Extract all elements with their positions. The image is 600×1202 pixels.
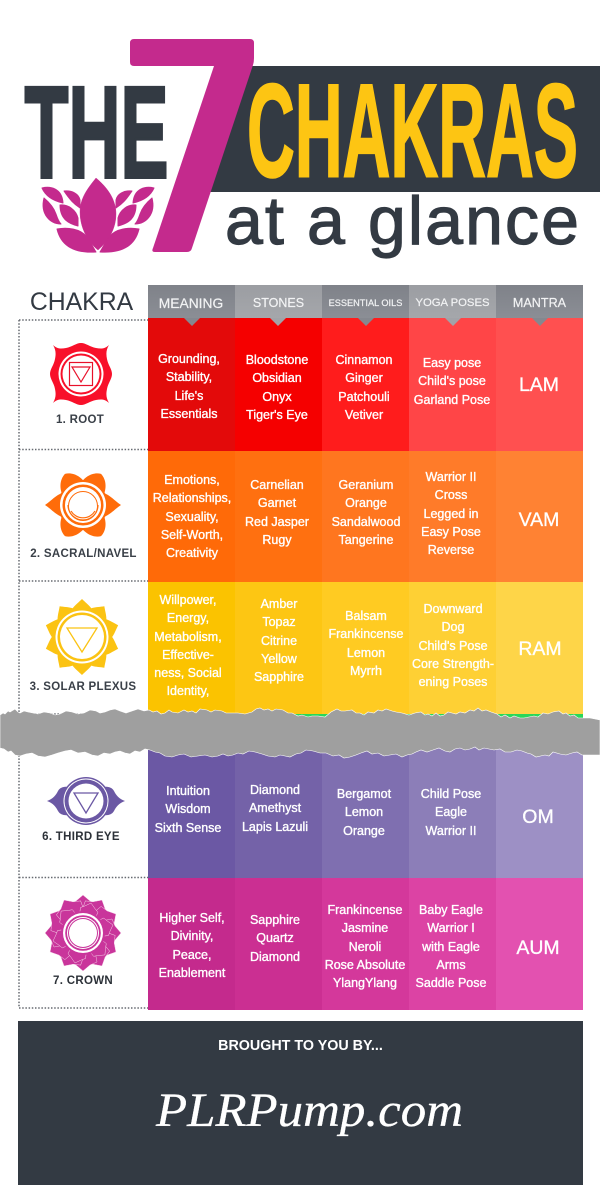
cell: solar mantra: RAM (518, 638, 562, 660)
title banner (190, 66, 600, 192)
icon: third eye chakra (47, 777, 125, 825)
table header (148, 285, 583, 318)
cell: third eye stones: Lapis Lazuli (242, 820, 308, 834)
cell: crown oils: Jasmine (342, 921, 388, 935)
cell: sacral stones: Carnelian (250, 478, 304, 492)
cell: root stones: Bloodstone (246, 353, 308, 367)
cell: solar oils: Frankincense (328, 627, 404, 641)
cell: crown stones: Quartz (256, 931, 294, 945)
cell: crown poses: Baby Eagle (419, 903, 483, 917)
cell: sacral poses: Reverse (428, 543, 474, 557)
cell: sacral oils: Sandalwood (332, 515, 400, 529)
icon: sacral chakra (45, 473, 121, 537)
cell: sacral oils: Tangerine (339, 533, 393, 547)
header: mantra (496, 285, 583, 318)
cell: sacral poses: Legged in (424, 507, 478, 521)
panel: crown chakra row (45, 878, 583, 1010)
cell: third eye stones: Amethyst (249, 801, 301, 815)
cell: third eye poses: Warrior II (426, 824, 476, 838)
header: essential oils: ESSENTIAL OILS (329, 298, 402, 308)
cell: root oils: Patchouli (338, 390, 390, 404)
footer site name: PLRPump.com (155, 1084, 463, 1137)
cell: crown stones: Diamond (250, 950, 300, 964)
cell: sacral meaning (148, 451, 235, 582)
cell: solar stones (235, 582, 322, 714)
panel: sacral chakra row (30, 451, 583, 582)
cell: solar meaning: ness, Social (154, 666, 222, 680)
cell: crown poses (409, 878, 496, 1010)
cell: root meaning: Grounding, (158, 352, 220, 366)
cell: third eye meaning (148, 745, 235, 878)
cell: sacral stones: Red Jasper (245, 515, 309, 529)
cell: sacral mantra: VAM (519, 509, 559, 531)
cell: solar stones: Topaz (262, 615, 296, 629)
cell: sacral oils (322, 451, 409, 582)
cell: sacral meaning: Relationships, (153, 491, 231, 505)
green sliver behind tear (235, 712, 583, 719)
cell: root stones: Tiger's Eye (246, 408, 308, 422)
cell: sacral stones (235, 451, 322, 582)
cell: third eye stones: Diamond (250, 783, 300, 797)
cell: third eye meaning: Intuition (166, 784, 210, 798)
cell: crown poses: Saddle Pose (416, 976, 486, 990)
icon: lotus (42, 178, 154, 252)
label: 6. third eye: 6. THIRD EYE (42, 831, 120, 843)
cell: root meaning (148, 318, 235, 451)
cell: root stones (235, 318, 322, 451)
big number 7 (130, 39, 254, 252)
cell: solar oils (322, 582, 409, 714)
cell: third eye poses: Eagle (435, 805, 467, 819)
cell: crown meaning: Peace, (173, 948, 211, 962)
cell: solar meaning: Metabolism, (154, 630, 222, 644)
cell: crown oils (322, 878, 409, 1010)
cell: solar oils: Lemon (347, 646, 385, 660)
cell: sacral stones: Rugy (262, 533, 292, 547)
cell: crown oils: Neroli (349, 940, 381, 954)
label: 7. crown: 7. CROWN (53, 975, 113, 987)
panel: third eye chakra row (42, 747, 583, 878)
icon: root chakra (50, 343, 112, 405)
cell: crown mantra (496, 878, 583, 1010)
title (24, 39, 600, 259)
cell: solar poses: Child's Pose (418, 639, 488, 653)
cell: third eye oils: Bergamot (337, 787, 391, 801)
cell: root stones: Onyx (262, 390, 292, 404)
header: meaning (148, 285, 235, 318)
cell: solar oils: Myrrh (350, 664, 382, 678)
cell: sacral meaning: Emotions, (164, 473, 220, 487)
cell: crown stones (235, 878, 322, 1010)
footer banner (18, 1021, 583, 1185)
cell: solar oils: Balsam (345, 609, 387, 623)
cell: sacral oils: Orange (345, 496, 387, 510)
cell: solar meaning (148, 582, 235, 714)
label: 1. root: 1. ROOT (56, 414, 104, 426)
title word: THE: THE (24, 58, 168, 206)
cell: third eye mantra (496, 745, 583, 878)
cell: crown meaning: Enablement (159, 966, 225, 980)
cell: solar stones: Yellow (261, 652, 297, 666)
cell: third eye meaning: Sixth Sense (155, 821, 221, 835)
cell: third eye oils: Orange (343, 824, 385, 838)
cell: root mantra: LAM (519, 374, 559, 396)
cell: root stones: Obsidian (252, 371, 302, 385)
cell: root meaning: Life's (175, 389, 203, 403)
cell: crown stones: Sapphire (250, 913, 300, 927)
cell: solar meaning: Willpower, (160, 593, 216, 607)
icon: solar plexus chakra (46, 599, 118, 675)
panel: root chakra row (50, 318, 583, 451)
cell: third eye poses (409, 745, 496, 878)
panel: solar plexus chakra row (30, 582, 583, 714)
cell: third eye poses: Child Pose (421, 787, 481, 801)
cell: crown poses: with Eagle (422, 940, 480, 954)
heading: chakra column: CHAKRA (30, 289, 133, 316)
cell: solar meaning: Effective- (162, 648, 214, 662)
cell: root poses: Easy pose (423, 356, 481, 370)
subtitle: at a glance: at a glance (225, 183, 579, 259)
cell: root oils: Ginger (345, 371, 383, 385)
cell: crown oils: Rose Absolute (325, 958, 405, 972)
cell: sacral poses: Cross (435, 488, 467, 502)
cell: root oils (322, 318, 409, 451)
cell: crown oils: Frankincense (327, 903, 403, 917)
cell: crown mantra: AUM (516, 937, 560, 959)
cell: solar meaning: Identity, (167, 684, 209, 698)
cell: solar stones: Sapphire (254, 670, 304, 684)
cell: root meaning: Stability, (166, 370, 212, 384)
cell: crown meaning (148, 878, 235, 1010)
cell: root poses (409, 318, 496, 451)
cell: crown meaning: Higher Self, (159, 911, 225, 925)
cell: solar poses: Core Strength- (412, 657, 494, 671)
cell: root poses: Child's pose (418, 374, 486, 388)
cell: sacral poses: Easy Pose (421, 525, 481, 539)
cell: sacral poses (409, 451, 496, 582)
cell: sacral meaning: Creativity (166, 546, 218, 560)
header: mantra: MANTRA (513, 296, 566, 310)
cell: third eye meaning: Wisdom (165, 802, 211, 816)
torn paper break (0, 708, 600, 758)
cell: crown poses: Arms (436, 958, 466, 972)
icon: crown chakra (45, 895, 121, 971)
cell: third eye mantra: OM (522, 806, 554, 828)
label: 2. sacral/navel: 2. SACRAL/NAVEL (30, 548, 137, 560)
header: stones (235, 285, 322, 318)
cell: third eye oils (322, 745, 409, 878)
header: meaning: MEANING (159, 296, 223, 311)
label: 3. solar plexus: 3. SOLAR PLEXUS (30, 681, 136, 693)
cell: sacral meaning: Sexuality, (165, 510, 219, 524)
cell: sacral mantra (496, 451, 583, 582)
header: yoga poses (409, 285, 496, 318)
cell: root oils: Vetiver (345, 408, 383, 422)
cell: solar meaning: Energy, (167, 611, 209, 625)
cell: solar poses: ening Poses (419, 675, 487, 689)
cell: sacral meaning: Self-Worth, (161, 528, 223, 542)
cell: sacral oils: Geranium (339, 478, 393, 492)
header: essential oils (322, 285, 409, 318)
cell: root mantra (496, 318, 583, 451)
cell: root meaning: Essentials (160, 407, 217, 421)
header: stones: STONES (253, 296, 304, 310)
cell: solar poses: Downward (423, 602, 483, 616)
cell: solar stones: Amber (261, 597, 297, 611)
cell: third eye stones (235, 745, 322, 878)
cell: solar poses: Dog (442, 620, 464, 634)
cell: third eye oils: Lemon (345, 805, 383, 819)
cell: sacral stones: Garnet (258, 496, 296, 510)
cell: solar poses (409, 582, 496, 714)
header pointers and dotted chakra column border (18, 318, 548, 1009)
footer caption: BROUGHT TO YOU BY... (218, 1038, 383, 1054)
cell: solar mantra (496, 582, 583, 714)
cell: sacral poses: Warrior II (426, 470, 476, 484)
cell: crown oils: YlangYlang (333, 976, 397, 990)
cell: root oils: Cinnamon (336, 353, 392, 367)
header: yoga poses: YOGA POSES (415, 297, 490, 309)
cell: root poses: Garland Pose (414, 393, 490, 407)
cell: crown poses: Warrior I (427, 921, 475, 935)
cell: solar stones: Citrine (261, 634, 297, 648)
cell: crown meaning: Divinity, (171, 929, 213, 943)
